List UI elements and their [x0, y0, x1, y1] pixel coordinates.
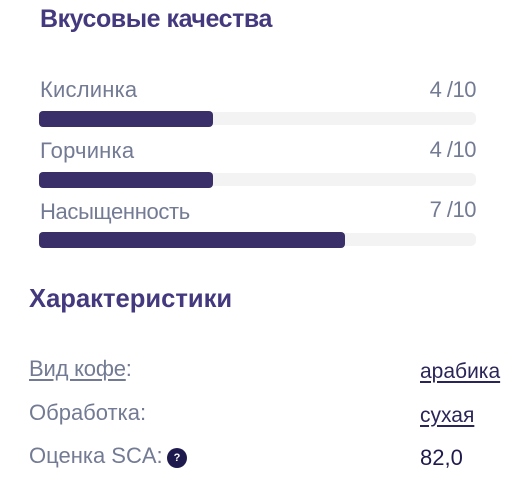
bar track: bitterness: [39, 173, 476, 186]
label: acidity: Кислинка: [40, 77, 137, 102]
icon: question mark: ?: [174, 452, 180, 464]
label: processing: Обработка:: [29, 400, 146, 425]
icon: question mark: [167, 448, 187, 468]
heading: taste qualities: Вкусовые качества: [40, 5, 272, 33]
value: dry: сухая: [420, 404, 474, 427]
bar fill: bitterness: [39, 172, 213, 188]
label: bitterness: Горчинка: [40, 138, 134, 163]
value: SCA score: 82,0: [420, 445, 463, 470]
bar track: acidity: [39, 112, 476, 125]
label: coffee type: Вид кофе:: [29, 356, 132, 381]
score: richness: 7 /10: [430, 197, 476, 222]
heading: characteristics: Характеристики: [29, 285, 232, 313]
label: SCA score: Оценка SCA:: [29, 443, 163, 468]
score: bitterness: 4 /10: [430, 137, 476, 162]
value: arabica: арабика: [420, 360, 500, 383]
bar track: richness: [39, 233, 476, 246]
score: acidity: 4 /10: [430, 77, 476, 102]
label: richness: Насыщенность: [40, 199, 190, 224]
bar fill: acidity: [39, 111, 213, 127]
bar fill: richness: [39, 232, 345, 248]
